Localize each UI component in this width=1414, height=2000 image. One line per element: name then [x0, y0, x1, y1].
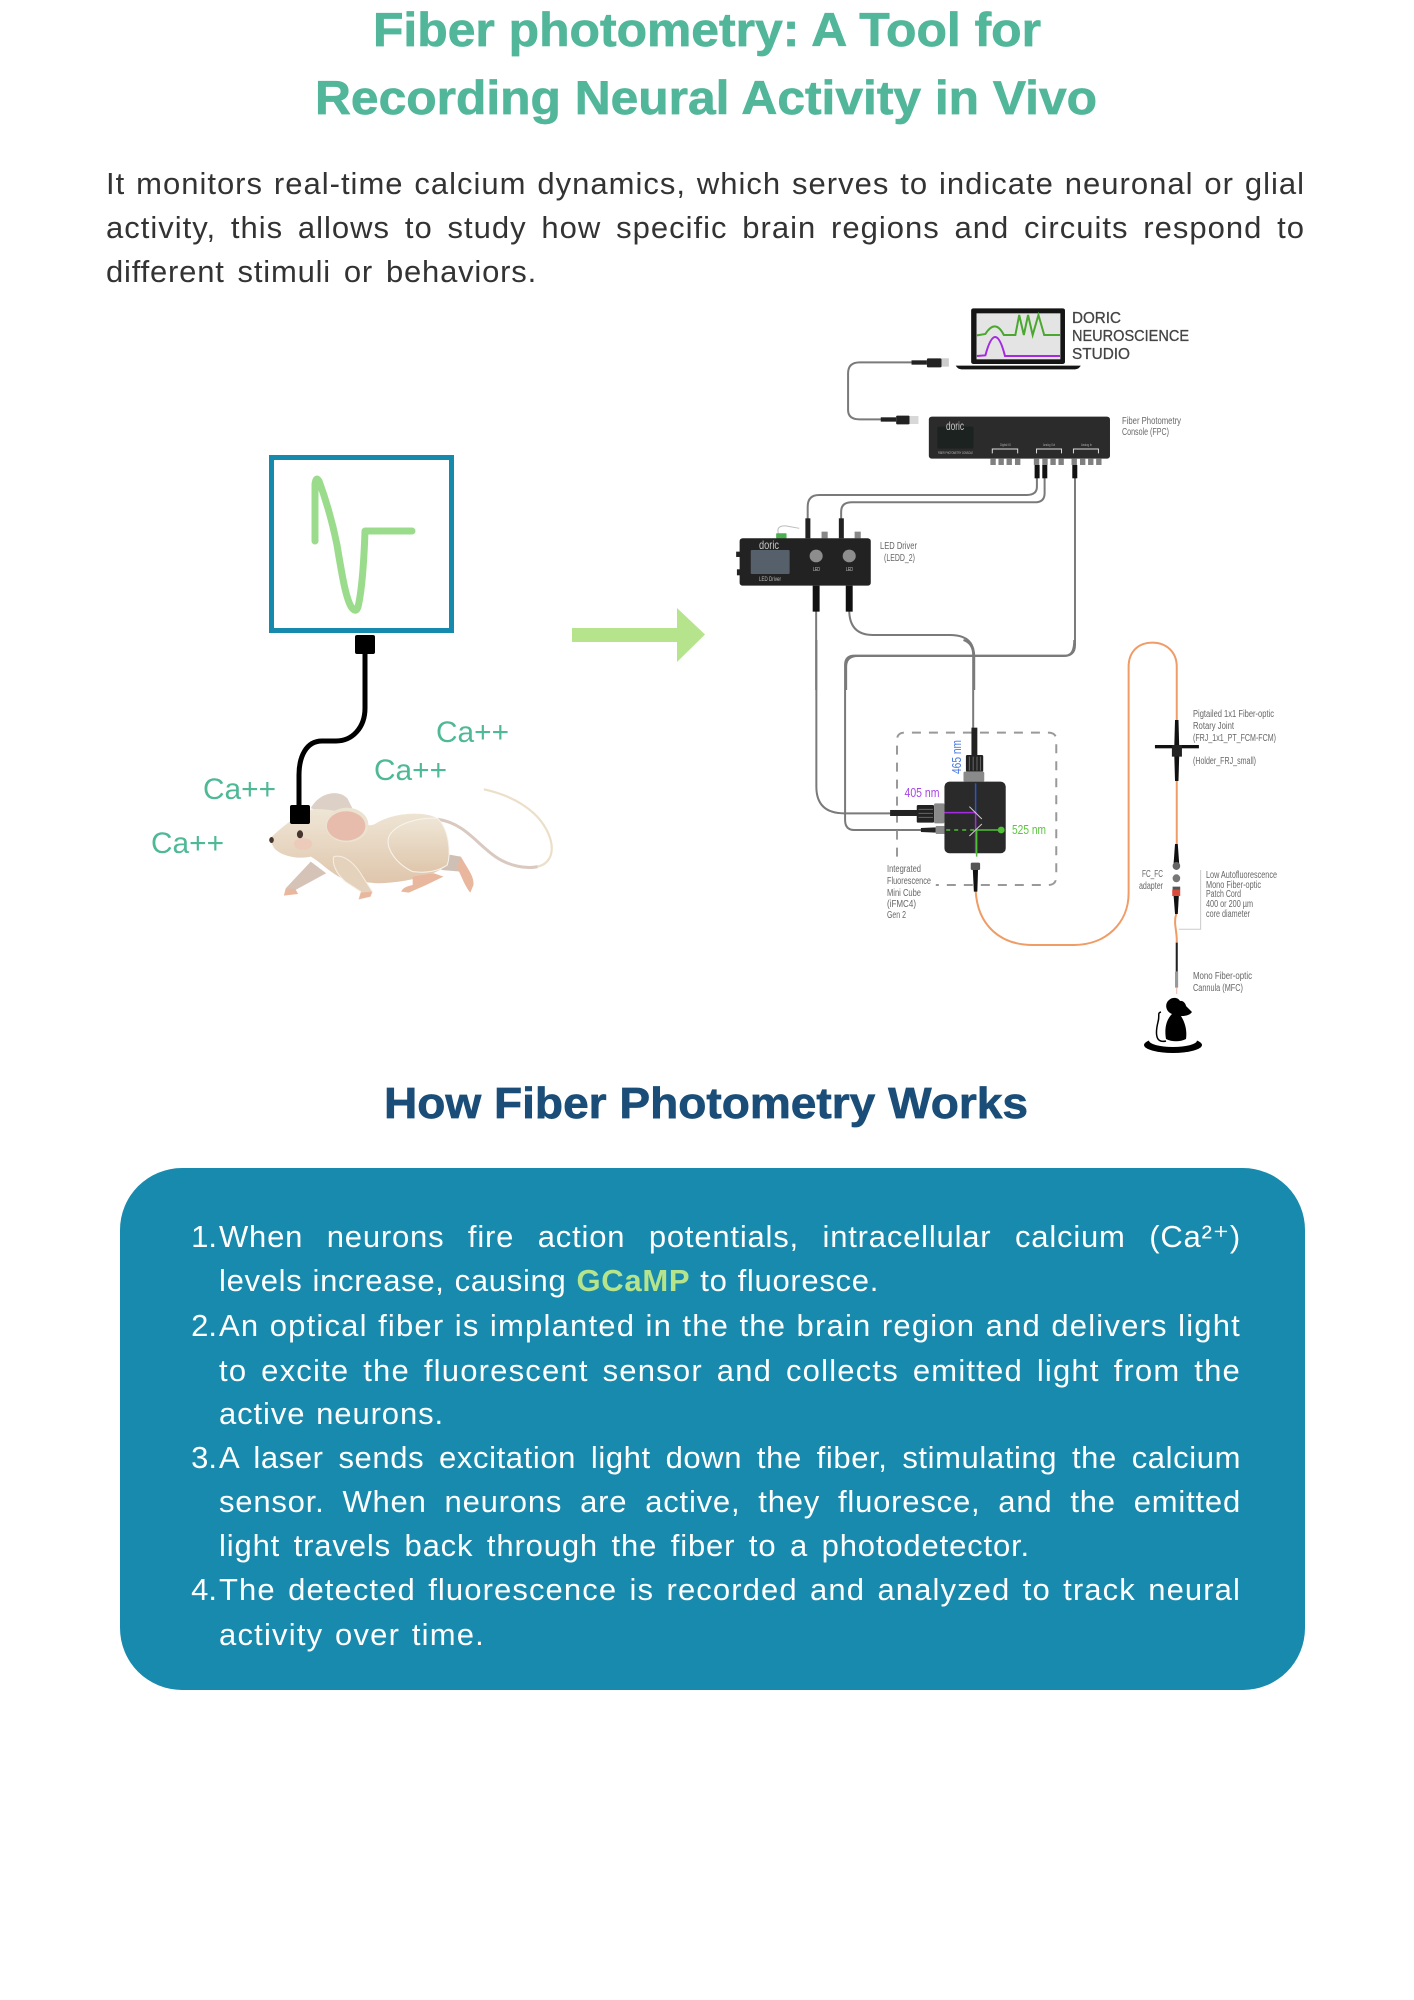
rotary joint label: [1193, 709, 1276, 767]
patch cord label: core diameter: [1206, 909, 1250, 920]
rotary joint: [1174, 720, 1179, 781]
dashed outline: [897, 733, 1056, 885]
calcium labels: Ca++: [436, 716, 509, 749]
upper equipment: laptop, console, LED driver: FIBER PHOTOMETRY CONSOLE: [938, 450, 973, 455]
orange fiber: [976, 643, 1177, 945]
cube connectors: [971, 728, 977, 756]
rotary joint label: Pigtailed 1x1 Fiber-optic: [1193, 709, 1274, 720]
step 2: 2.: [191, 1308, 217, 1343]
upper equipment: laptop, console, LED driver: LED Driver: [759, 577, 781, 583]
led driver: [778, 526, 799, 535]
console label: [1122, 416, 1181, 438]
mini cube label: Fluorescence: [887, 876, 931, 887]
calcium labels: Ca++: [203, 773, 276, 806]
cube: [944, 782, 1006, 853]
step 1: When neurons fire action potentials, intracellular calcium (Ca²⁺): [219, 1219, 1241, 1254]
upper equipment: laptop, console, LED driver: LED: [813, 567, 820, 573]
title: Recording Neural Activity in Vivo: [315, 71, 1097, 124]
title: [315, 3, 1097, 124]
patch cord label: Low Autofluorescence: [1206, 870, 1277, 881]
step 3: [191, 1440, 1241, 1563]
cannula label: Cannula (MFC): [1193, 983, 1243, 994]
title: Fiber photometry: A Tool for: [373, 3, 1041, 56]
laptop label: STUDIO: [1072, 346, 1130, 363]
mini cube label: Mini Cube: [887, 888, 921, 899]
section heading: How Fiber Photometry Works: [384, 1079, 1028, 1128]
patch cord label: Patch Cord: [1206, 889, 1241, 900]
step 4: [191, 1572, 1241, 1652]
step 3: A laser sends excitation light down the fiber, stimulating the calcium: [219, 1440, 1241, 1475]
led driver label: [880, 541, 917, 564]
upper equipment: laptop, console, LED driver: LED: [846, 567, 853, 573]
step 2: [191, 1308, 1241, 1431]
arrow: [572, 608, 705, 662]
step 2: to excite the fluorescent sensor and collects emitted light from the: [219, 1353, 1241, 1388]
upper equipment: laptop, console, LED driver: [736, 308, 1110, 690]
step 4: 4.: [191, 1572, 217, 1607]
cables: [808, 362, 1075, 690]
mini cube label: Integrated: [887, 864, 921, 875]
grey cables: [816, 640, 1074, 830]
intro paragraph: activity, this allows to study how specific brain regions and circuits respond to: [106, 210, 1305, 245]
rotary joint label: (Holder_FRJ_small): [1193, 756, 1256, 767]
adapter: [1174, 844, 1179, 863]
calcium labels: [151, 716, 509, 860]
rotary joint label: (FRJ_1x1_PT_FCM-FCM): [1193, 733, 1276, 744]
mini cube label: [887, 864, 931, 921]
laptop label: [1072, 310, 1189, 363]
step 3: light travels back through the fiber to a photodetector.: [219, 1528, 1030, 1563]
mouse illustration: [269, 789, 552, 899]
usb connectors: [912, 360, 927, 365]
step 2: An optical fiber is implanted in the the brain region and delivers light: [219, 1308, 1241, 1343]
upper equipment: laptop, console, LED driver: Analog Out: [1043, 442, 1056, 447]
adapter label: FC_FC: [1142, 869, 1163, 880]
signal box: [272, 458, 452, 630]
intro paragraph: It monitors real-time calcium dynamics, which serves to indicate neuronal or glial: [106, 166, 1305, 201]
upper equipment: laptop, console, LED driver: doric: [946, 419, 964, 433]
led driver label: LED Driver: [880, 541, 917, 552]
mini cube and fiber path: [816, 640, 1202, 1053]
upper equipment: laptop, console, LED driver: doric: [759, 538, 779, 552]
console label: Fiber Photometry: [1122, 416, 1181, 427]
calcium labels: Ca++: [151, 827, 224, 860]
step 1: 1.: [191, 1219, 217, 1254]
intro paragraph: different stimuli or behaviors.: [106, 254, 537, 289]
adapter label: adapter: [1139, 881, 1163, 892]
step 2: active neurons.: [219, 1396, 444, 1431]
led driver label: (LEDD_2): [884, 553, 915, 564]
patch cord label: [1206, 870, 1277, 920]
wavelength labels: 465 nm: [949, 740, 964, 774]
step 1: levels increase, causing GCaMP to fluoresce.: [219, 1263, 879, 1298]
console label: Console (FPC): [1122, 427, 1169, 438]
laptop label: DORIC: [1072, 310, 1121, 327]
patch cord label: 400 or 200 µm: [1206, 899, 1253, 910]
upper equipment: laptop, console, LED driver: Analog In: [1081, 442, 1092, 447]
panel: how it works: [120, 1168, 1305, 1690]
cannula: [1176, 943, 1178, 972]
illustration: mouse with signal monitor: [151, 455, 705, 900]
wavelength labels: [904, 740, 1046, 837]
step 4: The detected fluorescence is recorded and analyzed to track neural: [219, 1572, 1241, 1607]
intro paragraph: [106, 166, 1305, 289]
laptop: [971, 308, 1065, 364]
step 3: sensor. When neurons are active, they fluoresce, and the emitted: [219, 1484, 1241, 1519]
diagram: fiber photometry setup: [736, 308, 1277, 1053]
cannula label: [1193, 971, 1252, 994]
wavelength labels: 525 nm: [1012, 822, 1046, 837]
icon: mouse on platform: [1144, 998, 1202, 1053]
calcium labels: Ca++: [374, 754, 447, 787]
rotary joint label: Rotary Joint: [1193, 721, 1234, 732]
wavelength labels: 405 nm: [904, 785, 940, 800]
mini cube label: Gen 2: [887, 910, 906, 921]
mini cube label: (iFMC4): [887, 899, 916, 910]
step 1: [191, 1219, 1241, 1298]
cable connecting mouse to monitor: [299, 635, 375, 808]
laptop label: NEUROSCIENCE: [1072, 328, 1189, 345]
console: [929, 417, 1110, 459]
patch cord label: Mono Fiber-optic: [1206, 880, 1261, 891]
step 3: 3.: [191, 1440, 217, 1475]
step 4: activity over time.: [219, 1617, 485, 1652]
adapter label: [1139, 869, 1163, 892]
upper equipment: laptop, console, LED driver: Digital I/O: [1000, 442, 1011, 447]
cannula label: Mono Fiber-optic: [1193, 971, 1252, 982]
